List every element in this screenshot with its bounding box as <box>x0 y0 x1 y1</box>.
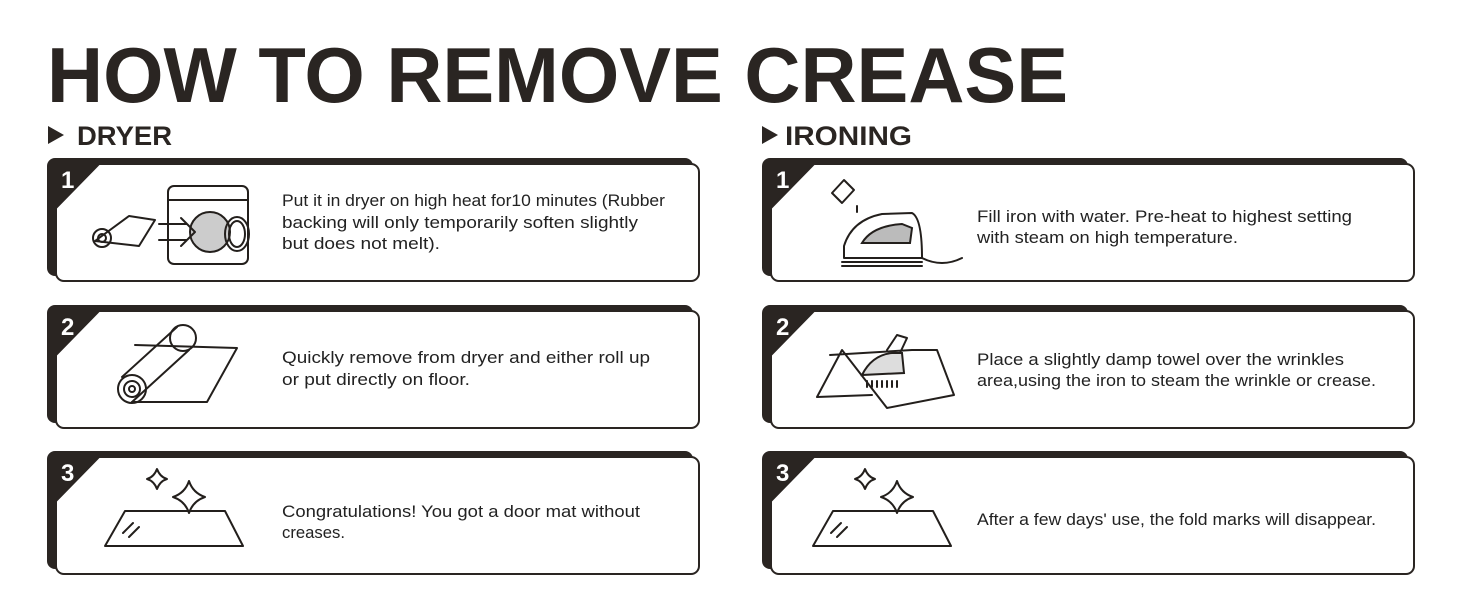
panel: dryer step 2 <box>47 305 699 428</box>
text <box>282 348 650 389</box>
text: or put directly on floor. <box>282 370 470 389</box>
panel: ironing step 1: 1 <box>776 167 789 194</box>
text: Congratulations! You got a door mat without <box>282 502 640 521</box>
text: Put it in dryer on high heat for10 minutes (Rubber <box>282 191 665 210</box>
title: HOW TO REMOVE CREASE <box>47 31 1068 119</box>
panel: dryer step 1 <box>47 158 699 281</box>
panel: ironing step 3: 3 <box>776 460 789 487</box>
heading: ironing: IRONING <box>785 121 912 151</box>
panel: dryer step 1: 1 <box>61 167 74 194</box>
text <box>282 502 640 542</box>
text: creases. <box>282 523 345 542</box>
panel: ironing step 3 <box>762 451 1414 574</box>
icon: roll <box>118 325 237 403</box>
text: backing will only temporarily soften slightly <box>282 213 639 232</box>
text: After a few days' use, the fold marks will disappear. <box>977 510 1376 529</box>
icon: iron on towel <box>817 335 954 408</box>
text: Place a slightly damp towel over the wrinkles <box>977 350 1344 369</box>
icon: clean mat <box>105 469 243 546</box>
panel: ironing step 2: 2 <box>776 314 789 341</box>
text <box>977 350 1376 390</box>
panel: ironing step 2 <box>762 305 1414 428</box>
heading: dryer: DRYER <box>77 121 172 151</box>
icon: iron with water <box>832 180 962 266</box>
icon: roll into dryer <box>93 186 249 264</box>
panel: dryer step 2: 2 <box>61 314 74 341</box>
panel: ironing step 1 <box>762 158 1414 281</box>
text <box>976 207 1352 247</box>
text: Fill iron with water. Pre-heat to highest setting <box>977 207 1352 226</box>
icon: clean mat <box>813 469 951 546</box>
text: with steam on high temperature. <box>976 228 1238 247</box>
text: Quickly remove from dryer and either roll up <box>282 348 650 367</box>
text <box>282 191 665 253</box>
text: but does not melt). <box>282 234 440 253</box>
panel: dryer step 3: 3 <box>61 460 74 487</box>
panel: dryer step 3 <box>47 451 699 574</box>
text: area,using the iron to steam the wrinkle or crease. <box>977 371 1376 390</box>
